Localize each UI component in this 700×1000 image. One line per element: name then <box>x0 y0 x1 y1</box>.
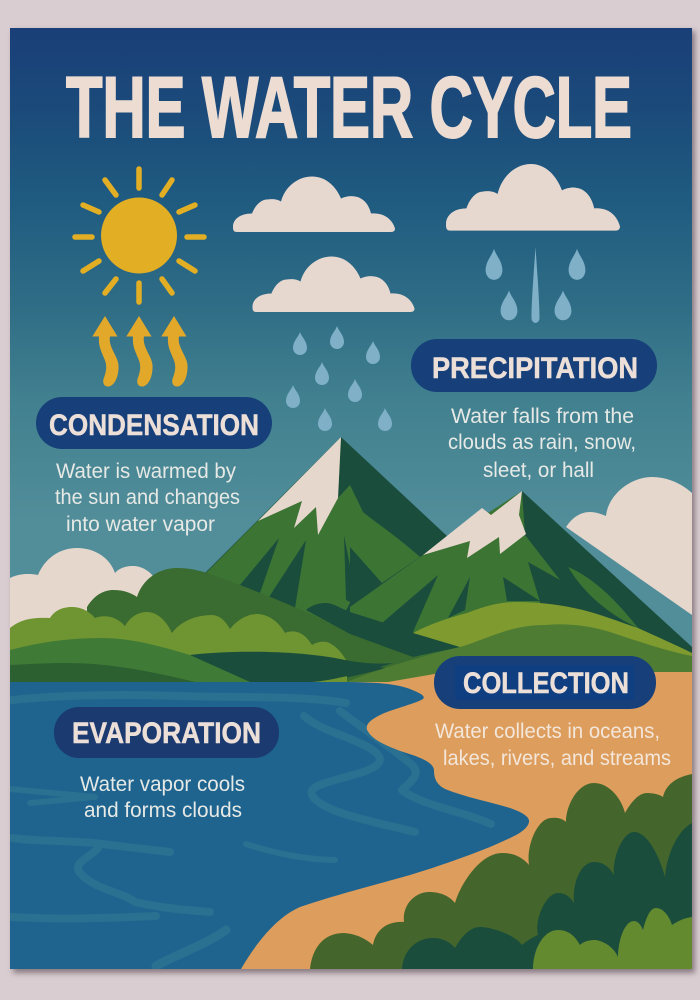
icon: rising heat arrows <box>92 316 188 387</box>
label: evaporation: EVAPORATION <box>72 717 261 750</box>
text: precipitation description: clouds as rain, snow, <box>448 431 636 454</box>
icon: raindrops under right cloud <box>486 247 585 323</box>
text: condensation description: into water vapor <box>66 513 215 536</box>
foreground trees <box>310 774 692 969</box>
label: condensation <box>36 397 272 449</box>
text: precipitation description <box>448 405 636 482</box>
text: evaporation description <box>80 776 244 817</box>
rolling hills <box>10 568 692 690</box>
text: collection description: Water collects in oceans, <box>435 720 660 743</box>
text: precipitation description: sleet, or hall <box>483 459 594 482</box>
icon: top cloud <box>233 176 395 232</box>
label: precipitation <box>411 339 657 392</box>
label: evaporation <box>54 707 279 758</box>
water: lake <box>10 682 529 969</box>
text: evaporation description: and forms clouds <box>84 799 242 822</box>
right mountain <box>350 491 692 657</box>
text: condensation description: the sun and changes <box>55 486 240 509</box>
left background cloud <box>10 548 152 628</box>
text: evaporation description: Water vapor cools <box>80 773 245 796</box>
icon: right cloud <box>446 164 620 231</box>
text: condensation description: Water is warmed by <box>56 460 236 483</box>
label: collection: COLLECTION <box>463 667 629 700</box>
icon: middle cloud <box>252 256 414 312</box>
text: collection description: lakes, rivers, and streams <box>443 747 671 770</box>
sandy beach <box>230 672 692 969</box>
text: collection description <box>435 720 671 770</box>
water ripples <box>10 695 491 966</box>
label: collection <box>434 656 656 709</box>
text: precipitation description: Water falls from the <box>451 405 634 428</box>
right background cloud <box>566 477 692 615</box>
label: condensation: CONDENSATION <box>49 409 259 442</box>
icon: raindrops under middle cloud <box>286 326 392 431</box>
icon: sun <box>75 169 204 302</box>
label: precipitation: PRECIPITATION <box>432 352 638 385</box>
text: condensation description <box>55 460 240 536</box>
left mountain <box>205 437 447 640</box>
